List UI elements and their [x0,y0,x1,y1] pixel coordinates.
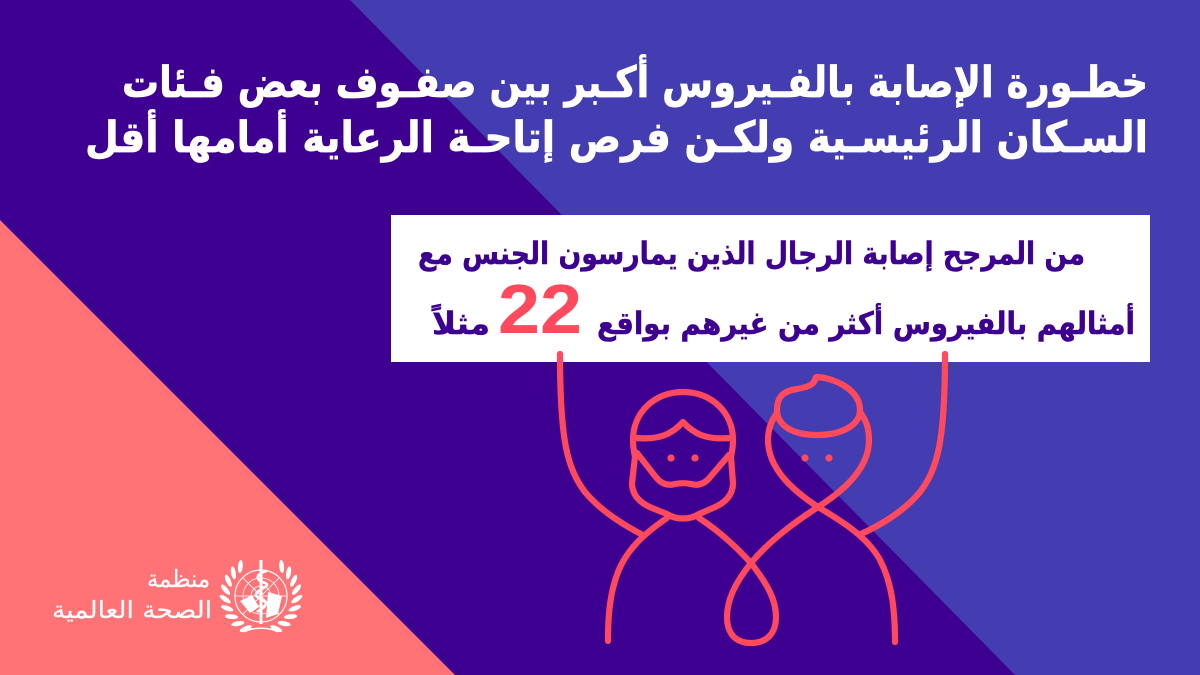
illustration: two men [560,354,945,643]
left man beard [637,453,729,485]
right man left eye [801,454,809,462]
left man body and loop [608,518,667,641]
left arm [560,354,641,534]
background panel: blue diagonal [350,0,1200,675]
icon: WHO emblem [218,560,304,634]
eyes [667,454,833,462]
logo text [52,565,212,624]
left man head [632,392,733,518]
right man body [768,413,895,642]
left man left eye [667,454,675,462]
callout background [391,215,1150,362]
right man hair [777,377,860,435]
left man right eye [691,454,699,462]
callout word: مثلاً [431,303,490,342]
right man right eye [825,454,833,462]
logo word 1: منظمة [147,565,210,593]
left man fringe [636,422,730,438]
logo word 2: الصحة العالمية [52,596,212,624]
logo: WHO [52,560,304,634]
callout line 1: من المرجح إصابة الرجال الذين يمارسون الجنس مع [418,236,1085,272]
right arm [861,354,945,534]
background panel: salmon corner [0,220,455,675]
number 22: 22 [498,270,582,348]
title [85,54,1148,163]
callout line 2: أمثالهم بالفيروس أكثر من غيرهم بواقع [597,303,1135,342]
callout panel [391,215,1150,362]
